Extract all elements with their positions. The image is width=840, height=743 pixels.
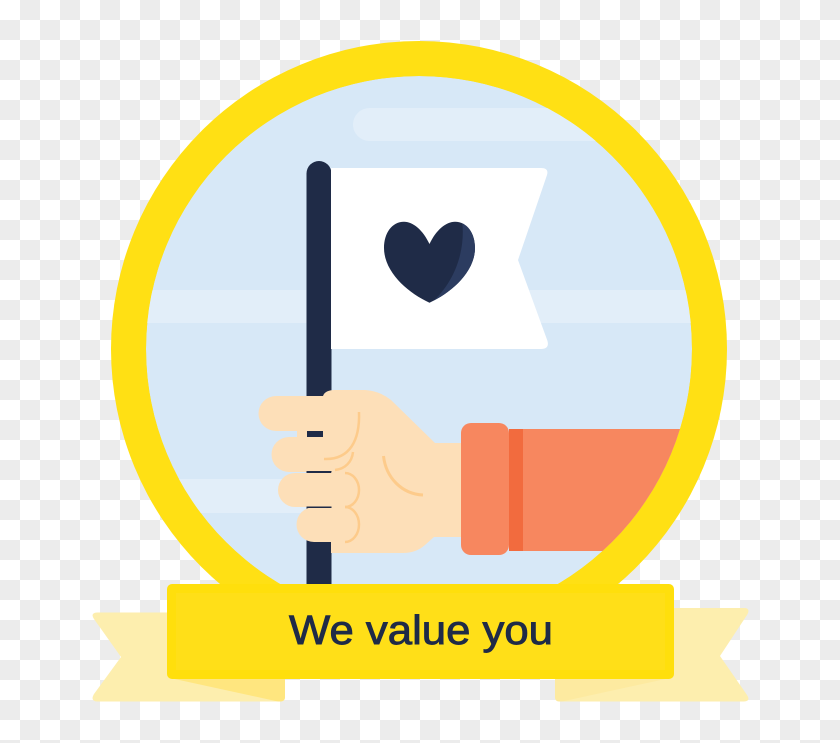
hand	[258, 390, 461, 553]
cloud stripe bottom	[179, 479, 306, 513]
sky panel	[146, 76, 692, 584]
sleeve	[523, 429, 680, 551]
ribbon fold right	[555, 678, 670, 702]
cloud stripe top	[353, 108, 596, 141]
finger creases	[345, 473, 359, 507]
finger 4	[296, 507, 360, 542]
ribbon fold left	[170, 678, 285, 702]
banner	[167, 584, 674, 679]
palm	[323, 390, 461, 553]
palm crease	[384, 456, 423, 495]
flag	[331, 168, 548, 349]
yellow circle frame	[111, 41, 727, 657]
thumb crease	[324, 412, 359, 470]
sleeve band	[509, 429, 523, 551]
ribbon tail left	[93, 612, 285, 702]
finger 2	[272, 437, 332, 472]
icon: heart	[384, 220, 480, 304]
sleeve cuff	[461, 423, 509, 555]
banner text: We value you	[289, 607, 553, 653]
ribbon tail right	[555, 608, 748, 702]
hand back between fingers	[297, 428, 307, 439]
finger 1	[258, 396, 324, 431]
flag pole	[306, 161, 332, 584]
cloud stripe middle	[120, 290, 720, 323]
finger 3	[278, 473, 360, 507]
finger gap lines	[306, 471, 332, 472]
